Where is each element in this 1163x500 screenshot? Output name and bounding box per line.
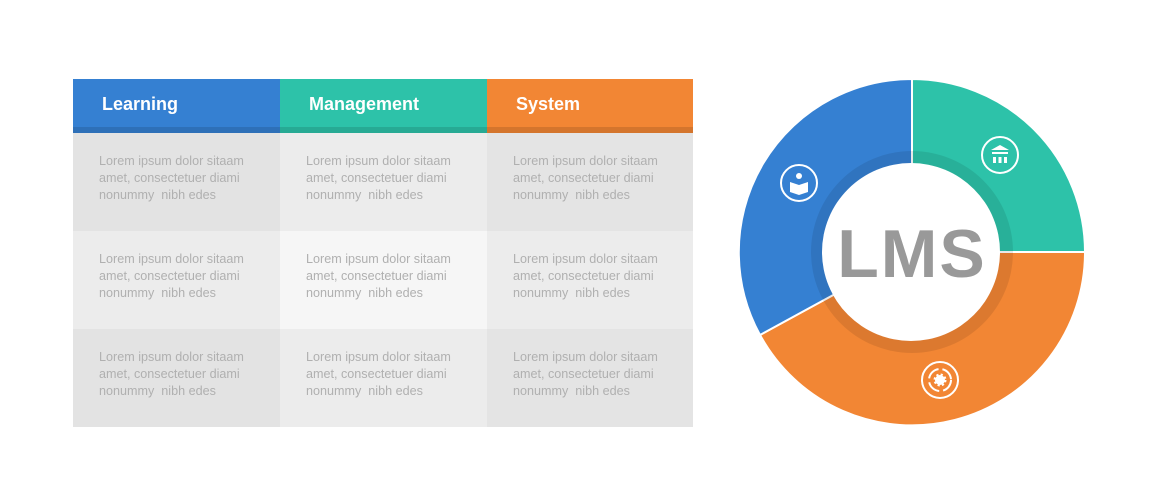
cell r3c2: Lorem ipsum dolor sitaam	[306, 350, 451, 364]
cell r3c3: amet, consectetuer diami	[513, 367, 654, 381]
cell r3c3: nonummy nibh edes	[513, 384, 630, 398]
cell r2c1: Lorem ipsum dolor sitaam	[99, 252, 244, 266]
cell r2c2: Lorem ipsum dolor sitaam	[306, 252, 451, 266]
segment: teal	[912, 79, 1085, 252]
cell r2c3: nonummy nibh edes	[513, 286, 630, 300]
cell r1c2: nonummy nibh edes	[306, 188, 423, 202]
cell r1c1: nonummy nibh edes	[99, 188, 216, 202]
header: Management: Management	[309, 94, 419, 114]
cell r3c3: Lorem ipsum dolor sitaam	[513, 350, 658, 364]
cell r1c2: amet, consectetuer diami	[306, 171, 447, 185]
cell r1c3: amet, consectetuer diami	[513, 171, 654, 185]
header: Management	[280, 79, 487, 133]
label: LMS: LMS	[837, 216, 987, 292]
cell r1c1	[73, 133, 280, 231]
cell r3c3	[487, 329, 693, 427]
cell r3c1: Lorem ipsum dolor sitaam	[99, 350, 244, 364]
cell r3c2: amet, consectetuer diami	[306, 367, 447, 381]
cell r1c1: amet, consectetuer diami	[99, 171, 240, 185]
cell r3c1	[73, 329, 280, 427]
cell r3c1: nonummy nibh edes	[99, 384, 216, 398]
header: Learning	[73, 79, 280, 133]
segment: orange	[760, 252, 1085, 425]
segment: blue	[739, 79, 912, 335]
cell r2c3	[487, 231, 693, 329]
icon: reader	[781, 165, 817, 201]
cell r1c3: Lorem ipsum dolor sitaam	[513, 154, 658, 168]
cell r2c3: Lorem ipsum dolor sitaam	[513, 252, 658, 266]
cell r1c1: Lorem ipsum dolor sitaam	[99, 154, 244, 168]
header: System	[487, 79, 693, 133]
header: System: System	[516, 94, 580, 114]
cell r2c1	[73, 231, 280, 329]
cell r1c3: nonummy nibh edes	[513, 188, 630, 202]
cell r2c1: nonummy nibh edes	[99, 286, 216, 300]
icon: gear cycle	[922, 362, 958, 398]
cell r3c1: amet, consectetuer diami	[99, 367, 240, 381]
icon: institution	[982, 137, 1018, 173]
cell r2c2: amet, consectetuer diami	[306, 269, 447, 283]
cell r2c2: nonummy nibh edes	[306, 286, 423, 300]
header: Learning: Learning	[102, 94, 178, 114]
cell r1c2	[280, 133, 487, 231]
cell r1c3	[487, 133, 693, 231]
cell r2c2	[280, 231, 487, 329]
cell r2c1: amet, consectetuer diami	[99, 269, 240, 283]
cell r1c2: Lorem ipsum dolor sitaam	[306, 154, 451, 168]
cell r2c3: amet, consectetuer diami	[513, 269, 654, 283]
center circle	[822, 163, 1000, 341]
table	[73, 79, 693, 427]
cell r3c2: nonummy nibh edes	[306, 384, 423, 398]
cell r3c2	[280, 329, 487, 427]
